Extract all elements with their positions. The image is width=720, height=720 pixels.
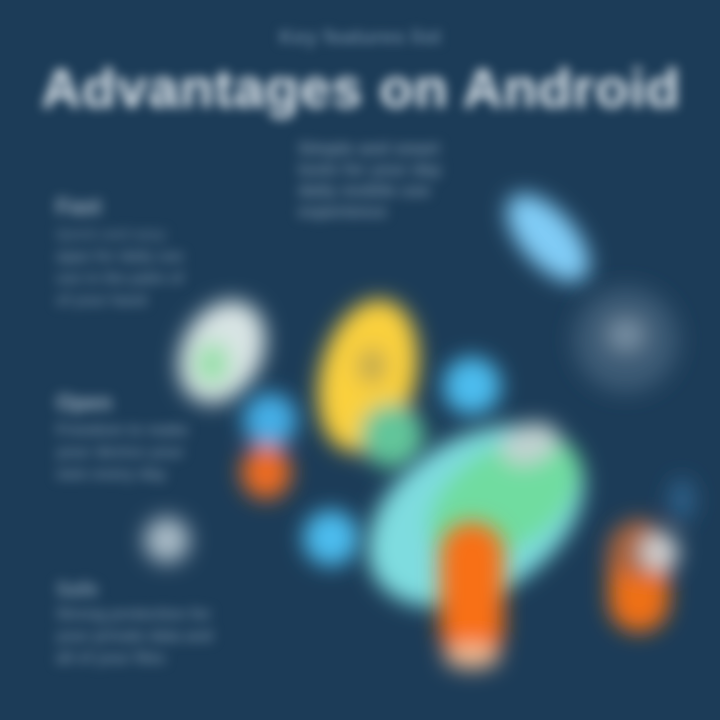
- icon: grey circle right: [574, 288, 678, 392]
- icon: yellow shield centre: [303, 289, 433, 468]
- text block: left one: Quick and easy: [56, 226, 166, 243]
- text block: left two: [50, 388, 190, 485]
- text block: left three: [52, 578, 216, 668]
- text block: left one: use in the palm of: [56, 270, 184, 287]
- text block: left two: your device your: [56, 444, 184, 461]
- text block: left one: [50, 192, 186, 310]
- text block: left one: apps for daily use: [56, 248, 184, 265]
- icon: white and green shield left: [161, 286, 283, 418]
- text block: left three: Safe: [56, 579, 98, 601]
- icon: blue circle centre right: [443, 357, 501, 415]
- icon: blue and orange capsule left: [241, 393, 297, 499]
- subtitle: Key features list: [279, 26, 441, 49]
- intro text block: [295, 138, 444, 224]
- intro text block: experience: [298, 202, 387, 221]
- text block: left three: your private data and: [56, 628, 213, 645]
- text block: left two: Open: [56, 390, 112, 415]
- intro text block: daily mobile use: [298, 181, 430, 200]
- text block: left three: Strong protection for: [56, 606, 211, 623]
- text block: left two: Freedom to make: [56, 422, 188, 439]
- text block: left two: own every day: [56, 466, 166, 483]
- icon: orange capsule right: [609, 478, 695, 632]
- text block: left one: Fast: [56, 194, 101, 219]
- intro text block: tools for your day: [298, 160, 442, 179]
- text block: left one: of your hand: [56, 292, 147, 309]
- icon: orange capsule: [440, 522, 504, 669]
- icon: blue dot lower centre: [303, 510, 359, 566]
- icon: blue pill top right: [492, 180, 604, 296]
- text block: left three: all of your files: [56, 650, 165, 667]
- icon: pale dot lower left: [144, 517, 190, 563]
- intro text block: Simple and smart: [298, 139, 440, 158]
- icon: large green and blue blob: [335, 387, 617, 645]
- title: Advantages on Android: [41, 57, 681, 119]
